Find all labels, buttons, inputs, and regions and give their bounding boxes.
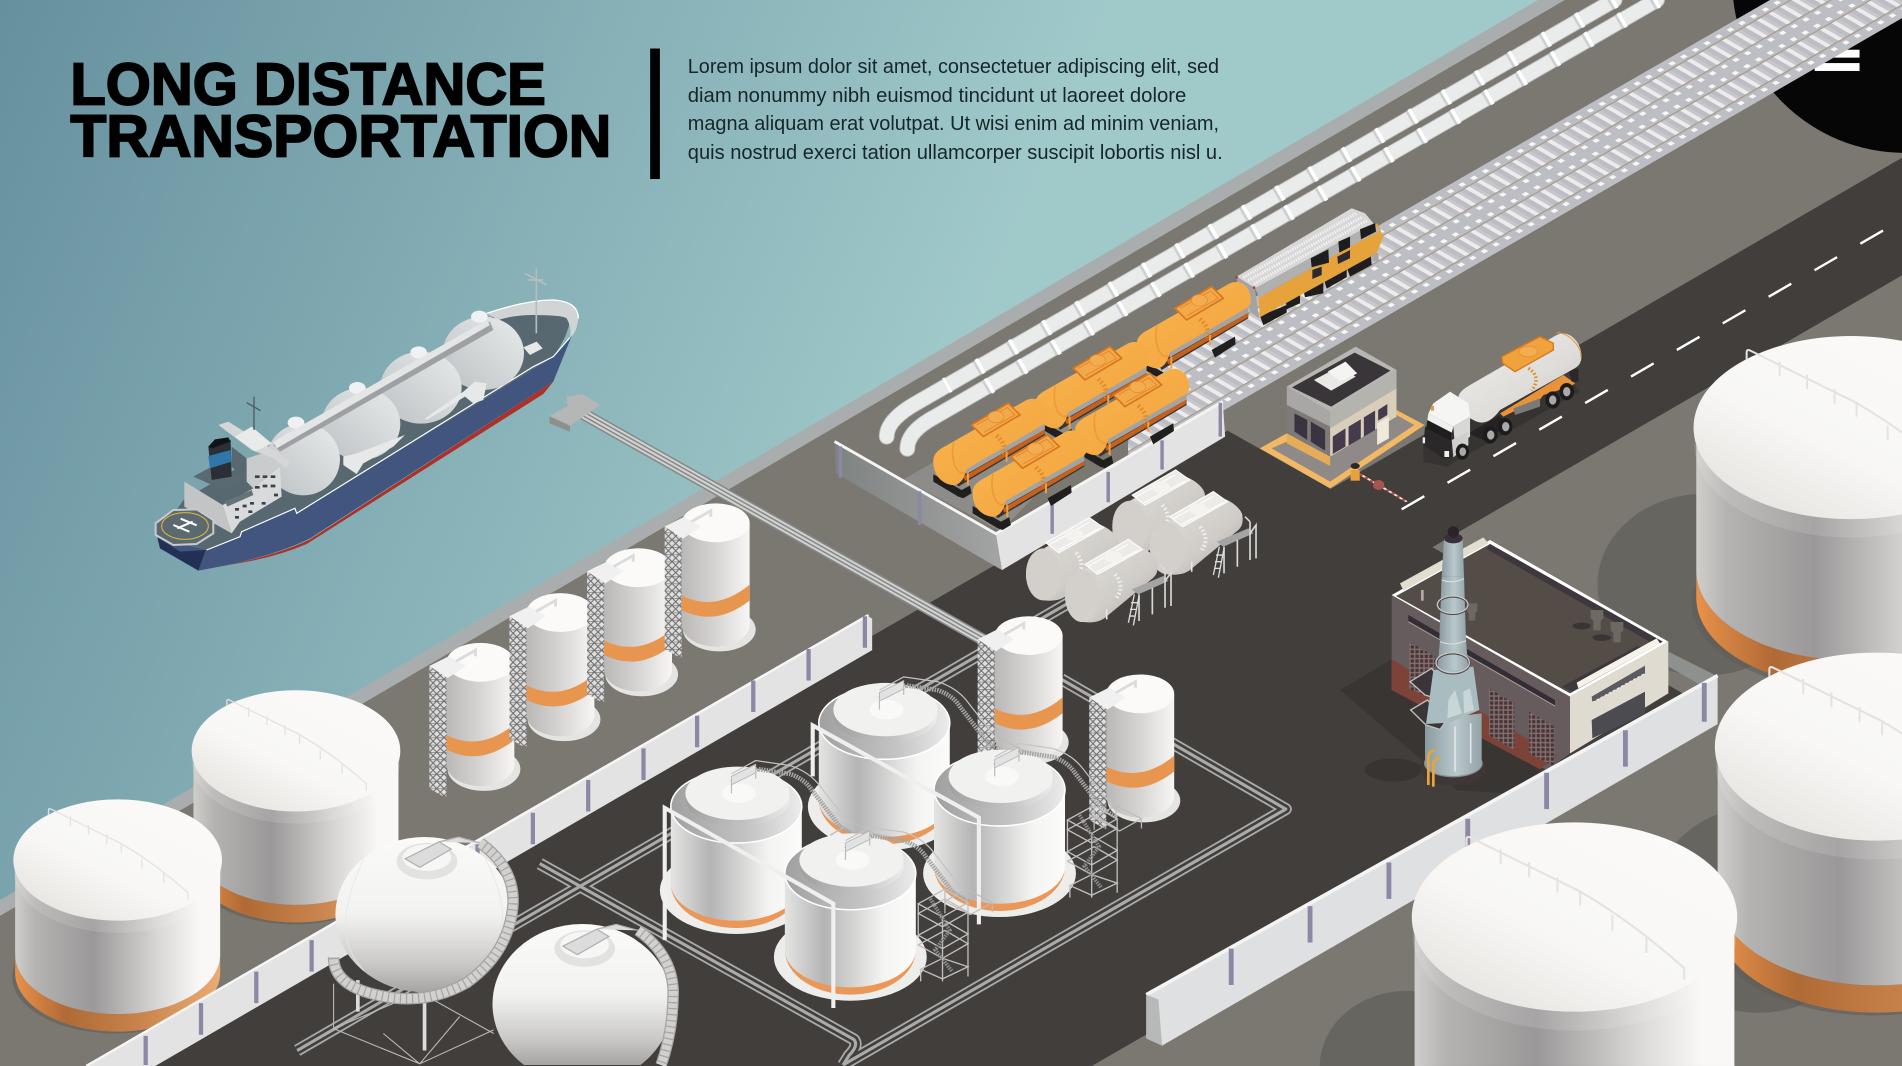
locomotive xyxy=(1235,208,1383,325)
rail yard wall xyxy=(835,402,1225,570)
tank front xyxy=(774,827,992,1001)
boom barrier xyxy=(1351,463,1407,502)
hull xyxy=(157,300,578,571)
tank rear xyxy=(808,677,1026,850)
LNG carrier ship xyxy=(156,268,578,571)
tall tanks with ladders xyxy=(429,503,1180,830)
large tank front left xyxy=(12,799,222,1033)
booth and barrier group xyxy=(1260,347,1425,502)
black corner badge xyxy=(1732,0,1902,153)
sphere tank two xyxy=(492,924,673,1065)
factory building xyxy=(1392,537,1718,770)
tank left xyxy=(660,761,878,934)
helipad xyxy=(156,509,213,545)
sphere tank one xyxy=(334,837,514,1064)
tank right xyxy=(923,744,1141,917)
jetty and pier pipeline xyxy=(549,394,989,643)
intro paragraph: quis nostrud exerci tation ullamcorper suscipit lobortis nisl u. xyxy=(688,142,1223,164)
guard booth xyxy=(1260,347,1425,488)
perimeter wall left xyxy=(86,615,872,1066)
tank ground shadows xyxy=(1320,494,1868,1066)
intro paragraph: Lorem ipsum dolor sit amet, consectetuer adipiscing elit, sed xyxy=(688,56,1219,78)
intro paragraph: magna aliquam erat volutpat. Ut wisi enim ad minim veniam, xyxy=(688,113,1219,135)
intro paragraph: diam nonummy nibh euismod tincidunt ut laoreet dolore xyxy=(688,85,1186,107)
title: LONG DISTANCE xyxy=(70,50,546,117)
yard pipe network xyxy=(297,603,1286,1065)
road centre line xyxy=(1402,220,1902,509)
vertical divider xyxy=(650,49,660,179)
deck cranes xyxy=(343,342,543,474)
tank wagons xyxy=(933,282,1251,530)
tanker truck xyxy=(1423,333,1581,467)
white storage tanks on legs xyxy=(1026,470,1256,625)
title xyxy=(70,50,611,169)
chimney xyxy=(1365,526,1487,787)
floating roof tanks with stairs xyxy=(660,677,1141,1008)
title: TRANSPORTATION xyxy=(70,102,611,169)
superstructure xyxy=(184,397,290,533)
large tank rear xyxy=(190,690,400,924)
large tank far right xyxy=(1692,336,1902,690)
factory shadow xyxy=(1340,658,1547,793)
menu icon xyxy=(1815,50,1860,71)
twin white pipelines xyxy=(887,0,1657,449)
large tank bottom xyxy=(1412,822,1737,1066)
forward mast xyxy=(525,268,547,333)
yard floor under wagons xyxy=(904,400,1098,531)
riser pipe left xyxy=(665,808,833,1008)
LNG domes xyxy=(267,311,524,495)
intro paragraph xyxy=(688,56,1223,164)
concrete quay edge xyxy=(0,0,1577,922)
factory group xyxy=(1340,526,1718,793)
perimeter wall right xyxy=(1146,676,1718,1046)
riser pipe right xyxy=(813,725,979,924)
large tank right xyxy=(1713,653,1902,1015)
asphalt road and plant yard xyxy=(128,158,1902,1066)
railway tracks xyxy=(1128,0,1902,455)
